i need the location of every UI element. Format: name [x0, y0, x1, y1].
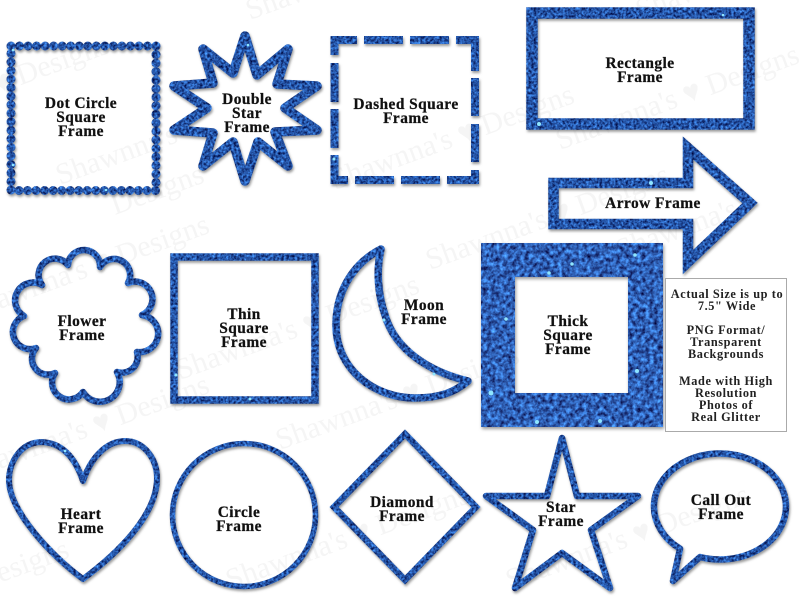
label: arrow frame: Arrow Frame: [605, 195, 701, 212]
background watermark: Shawnna's: [611, 192, 742, 267]
frame: circle: [172, 444, 316, 586]
background watermark: Shawnna's: [51, 117, 182, 192]
label: dashed square frame: Frame: [383, 110, 429, 127]
label: heart frame: Heart: [61, 506, 102, 523]
label: moon frame: Frame: [401, 311, 447, 328]
frame: star: [486, 438, 638, 588]
label: flower frame: Flower: [58, 313, 106, 330]
background watermark: Shawnna's ♥ Designs: [326, 78, 578, 197]
label: dot circle square frame: Square: [56, 109, 106, 126]
frame: diamond: [334, 434, 476, 580]
label: thick square frame: Square: [543, 327, 593, 344]
label: star frame: Star: [546, 499, 576, 516]
label: rectangle frame: Rectangle: [605, 55, 675, 72]
frame: call out: [654, 453, 786, 581]
label: heart frame: Frame: [58, 520, 104, 537]
label: thick square frame: Frame: [545, 341, 591, 358]
frame: thick square: [481, 243, 663, 427]
frame: thin square: [174, 257, 315, 400]
frame: heart: [9, 441, 157, 579]
label: double star frame: Double: [222, 91, 272, 108]
info: format: Transparent: [690, 335, 762, 349]
label: thick square frame: Thick: [548, 313, 588, 330]
label: diamond frame: Diamond: [370, 494, 434, 511]
info: format: Backgrounds: [688, 347, 764, 361]
label: circle frame: Circle: [218, 504, 260, 521]
background watermark: Shawnna's ♥ Designs: [551, 38, 800, 157]
label: double star frame: Frame: [224, 119, 270, 136]
background watermark: Shawnna's ♥ Designs: [501, 478, 753, 597]
label: thin square frame: Square: [219, 320, 269, 337]
label: call out frame: Call Out: [691, 492, 752, 509]
label: diamond frame: Frame: [379, 508, 425, 525]
label: double star frame: Star: [232, 105, 262, 122]
background watermark: Designs: [106, 158, 208, 222]
label: dot circle square frame: Frame: [58, 123, 104, 140]
label: moon frame: Moon: [404, 297, 444, 314]
frame: dashed square: [332, 40, 475, 180]
label: dashed square frame: Dashed Square: [353, 96, 459, 113]
info: size: Actual Size is up to: [671, 287, 783, 301]
frame: flower: [13, 250, 158, 402]
label: dot circle square frame: Dot Circle: [45, 95, 117, 112]
background watermark: Shawnna's ♥ Designs: [221, 478, 473, 597]
info box: [666, 278, 786, 432]
label: rectangle frame: Frame: [617, 69, 663, 86]
frame: rectangle: [532, 13, 749, 126]
background watermark: Shawnna's ♥ Designs: [421, 158, 673, 277]
info: material: Photos of: [699, 398, 753, 412]
label: call out frame: Frame: [698, 506, 744, 523]
frame: arrow: [554, 148, 750, 262]
label: flower frame: Frame: [59, 327, 105, 344]
label: thin square frame: Frame: [221, 334, 267, 351]
label: star frame: Frame: [538, 513, 584, 530]
info: material: Made with High: [679, 374, 773, 388]
info: format: PNG Format/: [687, 323, 765, 337]
info: size: 7.5" Wide: [698, 299, 756, 313]
frame: double star: [174, 36, 317, 181]
frame: moon: [336, 249, 468, 398]
background watermark: Shawnna's ♥ Designs: [171, 268, 423, 387]
background watermark: Shawnna's ♥ Designs: [271, 338, 523, 457]
label: circle frame: Frame: [216, 518, 262, 535]
info: material: Resolution: [695, 386, 757, 400]
label: thin square frame: Thin: [227, 306, 261, 323]
info: material: Real Glitter: [691, 410, 761, 424]
frame: dot circle square: [11, 46, 156, 191]
